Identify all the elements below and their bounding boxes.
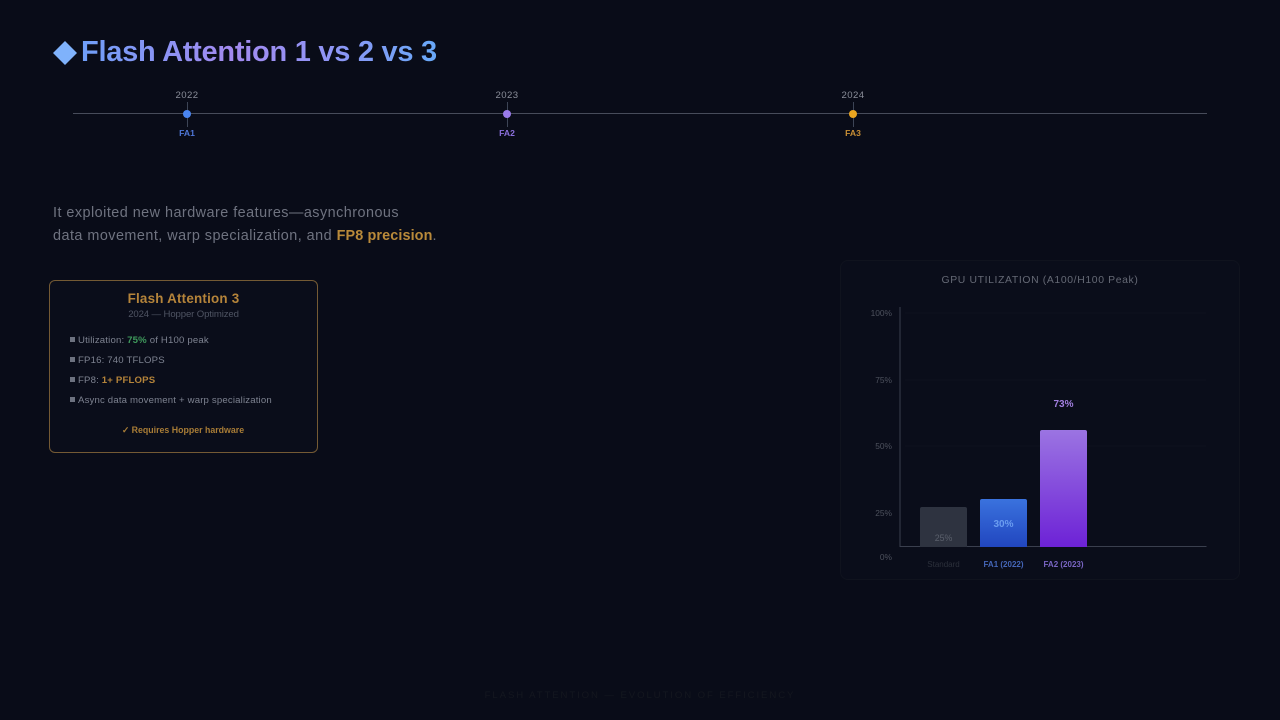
bar: Standard 25%: 25% (935, 533, 952, 543)
milestone: FA3 2024: 2024 (842, 90, 864, 101)
milestone: FA3 2024 (842, 90, 864, 138)
text block: description (53, 205, 437, 244)
y axis labels: 0% (880, 552, 893, 562)
bar: FA1 30% (980, 499, 1027, 547)
milestone: FA2 2023 (496, 90, 518, 138)
x axis labels (927, 560, 1084, 569)
y axis labels: 25% (875, 508, 893, 518)
milestone: FA1 2022: 2022 (176, 90, 198, 101)
y axis labels: 50% (875, 441, 893, 451)
bar: FA2 73% (1040, 399, 1087, 547)
milestone: FA1 2022: FA1 (179, 128, 195, 138)
spec: FP16: FP16: 740 TFLOPS (78, 355, 165, 366)
axes (900, 307, 1206, 546)
milestone: FA2 2023: FA2 (499, 128, 515, 138)
spec: async: Async data movement + warp specialization (78, 395, 272, 406)
milestone: FA2 2023: 2023 (496, 90, 518, 101)
milestone: FA3 2024: FA3 (845, 128, 861, 138)
title: Flash Attention 1 vs 2 vs 3 (81, 36, 437, 68)
x axis labels: Standard (927, 560, 960, 569)
y axis labels: 100% (871, 308, 893, 318)
x axis labels: FA1 (2022) (983, 560, 1024, 569)
chart heading: GPU UTILIZATION (A100/H100 Peak) (942, 275, 1138, 286)
milestone: FA1 2022 (176, 90, 198, 138)
bar chart (871, 307, 1206, 569)
bar: Standard 25% (920, 507, 967, 547)
text block: description: data movement, warp specialization, and FP8 precision. (53, 228, 437, 244)
footer: FLASH ATTENTION — EVOLUTION OF EFFICIENCY (485, 690, 795, 701)
panel: GPU utilization chart (840, 260, 1240, 580)
icon: diamond (53, 41, 77, 65)
card footnote: ✓ Requires Hopper hardware (122, 425, 244, 435)
y axis labels: 75% (875, 375, 893, 385)
bar: FA1 30%: 30% (993, 519, 1014, 530)
panel: Flash Attention 3 card (49, 280, 318, 453)
spec: utilization: Utilization: 75% of H100 peak (78, 335, 209, 346)
text block: description: It exploited new hardware features—asynchronous (53, 205, 399, 221)
y axis labels (871, 308, 893, 562)
spec: FP8: FP8: 1+ PFLOPS (78, 375, 155, 386)
card subtitle: 2024 — Hopper Optimized (128, 309, 239, 320)
bar: FA2 73%: 73% (1053, 399, 1074, 410)
timeline (73, 90, 1207, 138)
x axis labels: FA2 (2023) (1043, 560, 1084, 569)
card heading: Flash Attention 3 (128, 291, 239, 306)
